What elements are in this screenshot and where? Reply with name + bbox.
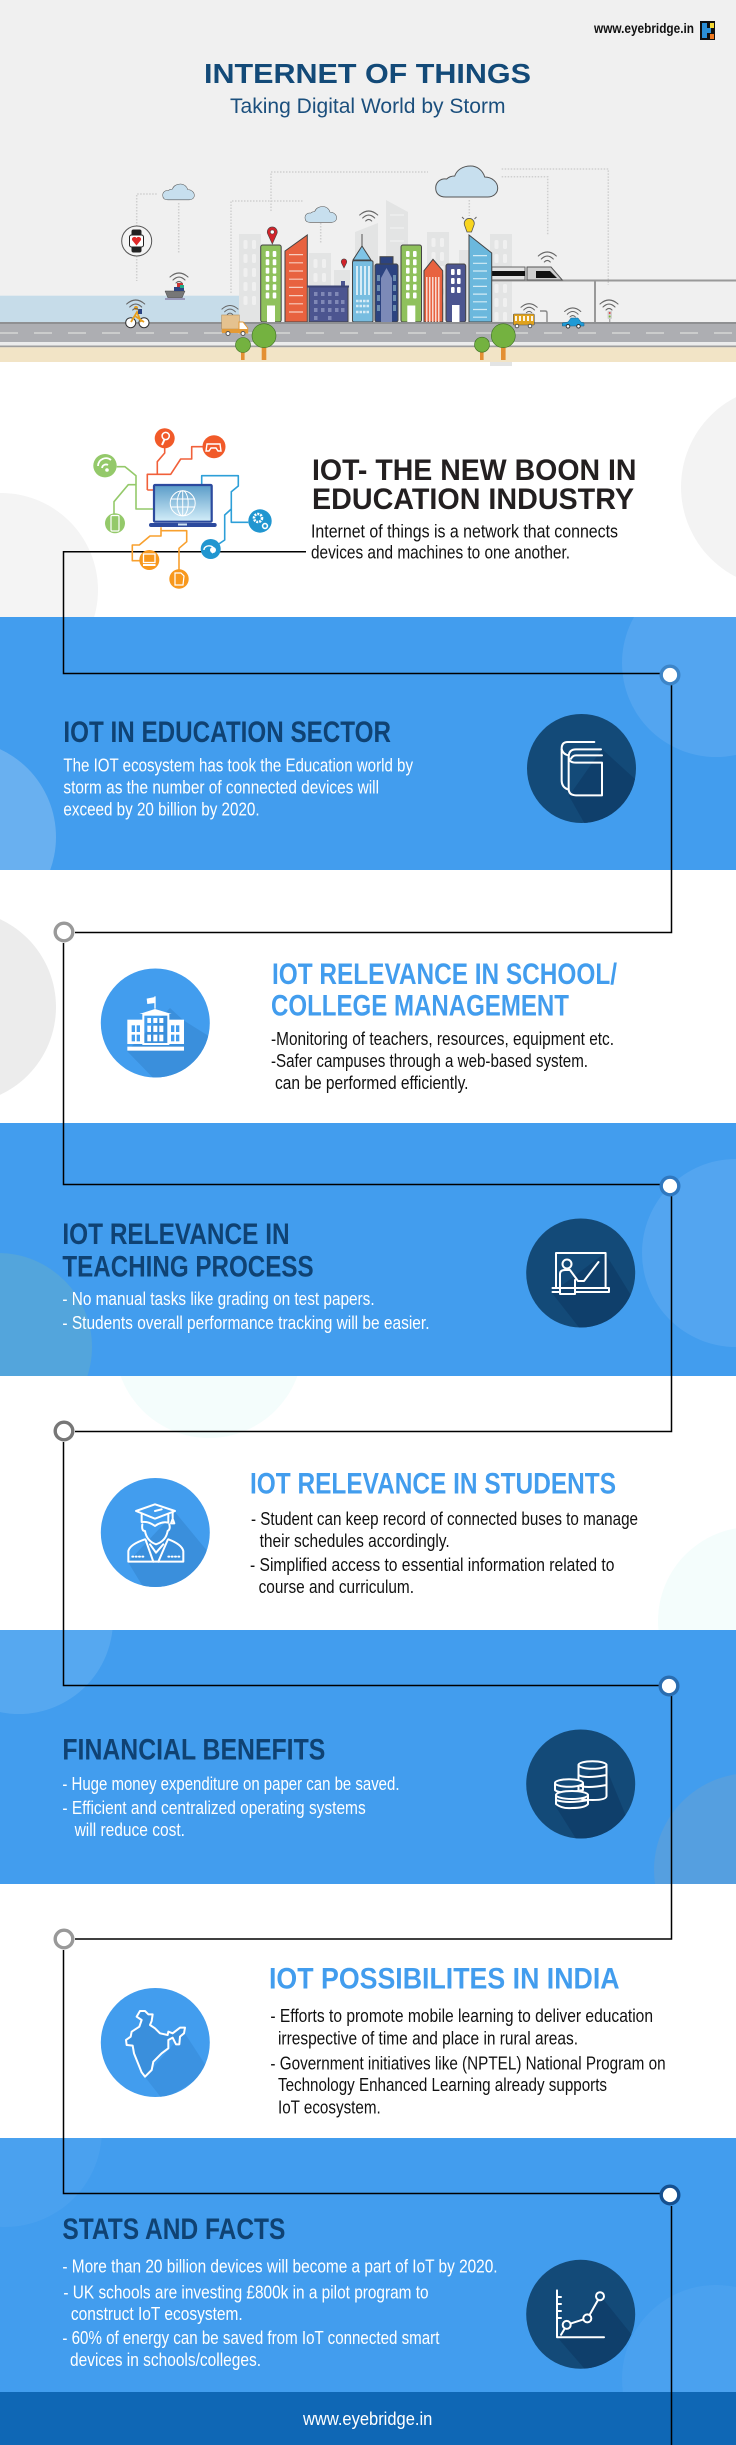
body text: - Government initiatives like (NPTEL) National Program on: [270, 2053, 666, 2073]
icon: street lamp: [540, 311, 547, 322]
description: [311, 521, 618, 562]
body text: can be performed efficiently.: [275, 1073, 468, 1093]
icon: phone: [105, 513, 125, 533]
title: INTERNET OF THINGS: [204, 58, 531, 89]
icon: delivery van: [222, 315, 248, 336]
footer website link: www.eyebridge.in: [302, 2409, 432, 2429]
icon: location pins: [267, 227, 347, 268]
icon: car: [562, 318, 584, 328]
body text: devices in schools/colleges.: [70, 2350, 261, 2370]
blue band 4 background: [0, 2138, 736, 2392]
icon: chat: [201, 539, 221, 559]
heading line two: TEACHING PROCESS: [62, 1251, 314, 1284]
panel: IoT in education sector: [63, 714, 640, 830]
body text: [62, 1289, 430, 1333]
body text: - Efforts to promote mobile learning to deliver education: [270, 2006, 653, 2026]
icons: wifi signals: [127, 211, 618, 317]
body text: - Efficient and centralized operating systems: [62, 1798, 366, 1818]
icon: wifi: [93, 454, 117, 477]
body text: - No manual tasks like grading on test papers.: [62, 1289, 375, 1309]
blue band 3 background: [0, 1630, 736, 1884]
body text: construct IoT ecosystem.: [71, 2304, 243, 2324]
panel: possibilities in India: [101, 1962, 666, 2117]
body text: [62, 2256, 498, 2370]
body text: - 60% of energy can be saved from IoT connected smart: [62, 2328, 439, 2348]
panel: IoT the new boon: [93, 428, 637, 589]
body text: [271, 1029, 614, 1093]
icon: cyclist: [126, 306, 149, 328]
header panel: [0, 0, 736, 366]
laptop: [149, 485, 217, 527]
icon: file: [169, 569, 189, 589]
icon: line chart: [526, 2260, 640, 2375]
dotted network lines: [137, 169, 608, 293]
heading: IOT RELEVANCE IN: [62, 1218, 290, 1251]
white section background circles: [0, 386, 736, 1715]
panel: teaching process: [62, 1218, 640, 1335]
blue band 2 background: [0, 1123, 736, 1376]
heading: IOT IN EDUCATION SECTOR: [63, 716, 391, 749]
heading: IOT- THE NEW BOON IN: [312, 454, 636, 487]
road: [0, 322, 736, 362]
panel: school and college management: [101, 958, 618, 1093]
icon: graduate: [101, 1478, 210, 1590]
icon: gears: [248, 509, 272, 533]
body text: - Student can keep record of connected buses to manage: [251, 1509, 638, 1529]
icon: search: [155, 428, 175, 448]
connector timeline: [55, 552, 679, 2445]
icon: smart watch: [122, 226, 152, 256]
body text: - Simplified access to essential information related to: [250, 1555, 614, 1575]
icon: gamepad: [202, 435, 226, 458]
footer band: [0, 2392, 736, 2445]
body text: - UK schools are investing £800k in a pilot program to: [63, 2282, 429, 2302]
panel: students: [101, 1467, 638, 1597]
clouds: [163, 166, 498, 222]
icon: computer: [139, 550, 159, 570]
panel: financial benefits: [63, 1730, 636, 1838]
body text: course and curriculum.: [259, 1577, 414, 1597]
description: devices and machines to one another.: [311, 542, 570, 562]
body text: irrespective of time and place in rural areas.: [278, 2028, 578, 2048]
rail bridge: [491, 280, 736, 322]
body text: -Monitoring of teachers, resources, equipment etc.: [271, 1029, 614, 1049]
smart city illustration: [0, 166, 736, 366]
body text: Technology Enhanced Learning already supports: [278, 2075, 607, 2095]
background buildings: [239, 200, 512, 366]
water: [0, 296, 240, 323]
heading: FINANCIAL BENEFITS: [62, 1733, 325, 1766]
icon: teacher at board: [526, 1218, 640, 1335]
description: Internet of things is a network that connects: [311, 521, 618, 541]
icon: bus: [513, 314, 534, 328]
heading: IOT POSSIBILITES IN INDIA: [269, 1962, 620, 1996]
body text: storm as the number of connected devices will: [63, 777, 379, 797]
body text: - Students overall performance tracking will be easier.: [62, 1313, 430, 1333]
panel: stats and facts: [62, 2213, 640, 2375]
body text: their schedules accordingly.: [260, 1531, 450, 1551]
colour towers: [261, 245, 281, 322]
heading: IOT RELEVANCE IN STUDENTS: [250, 1467, 616, 1500]
body text: The IOT ecosystem has took the Education world by: [63, 755, 413, 775]
body text: - More than 20 billion devices will become a part of IoT by 2020.: [62, 2256, 498, 2276]
icon: eyebridge logo: [700, 21, 715, 40]
icon: coin stacks: [526, 1730, 636, 1838]
heading line two: COLLEGE MANAGEMENT: [271, 990, 569, 1023]
icon: school building: [100, 968, 210, 1078]
body text: [270, 2006, 666, 2117]
body text: will reduce cost.: [74, 1820, 185, 1840]
icon: cargo ship: [165, 283, 185, 300]
body text: [250, 1509, 638, 1597]
icon: books: [527, 714, 640, 830]
icon: map of India: [101, 1988, 210, 2100]
body text: [63, 755, 413, 819]
body text: -Safer campuses through a web-based system.: [271, 1051, 588, 1071]
heading: STATS AND FACTS: [62, 2213, 285, 2246]
website link: www.eyebridge.in: [593, 21, 694, 36]
train: [492, 267, 562, 280]
body text: exceed by 20 billion by 2020.: [63, 799, 260, 819]
body text: [62, 1774, 400, 1840]
body text: IoT ecosystem.: [278, 2097, 381, 2117]
subtitle: Taking Digital World by Storm: [230, 95, 506, 118]
blue band 1 background: [0, 617, 736, 870]
body text: - Huge money expenditure on paper can be saved.: [62, 1774, 400, 1794]
icon: traffic light: [608, 311, 612, 322]
icon: smart bulb: [462, 217, 476, 232]
heading line two: EDUCATION INDUSTRY: [312, 483, 634, 516]
heading: IOT RELEVANCE IN SCHOOL/: [272, 958, 618, 991]
device network illustration: [93, 428, 272, 589]
trees: [236, 324, 515, 360]
